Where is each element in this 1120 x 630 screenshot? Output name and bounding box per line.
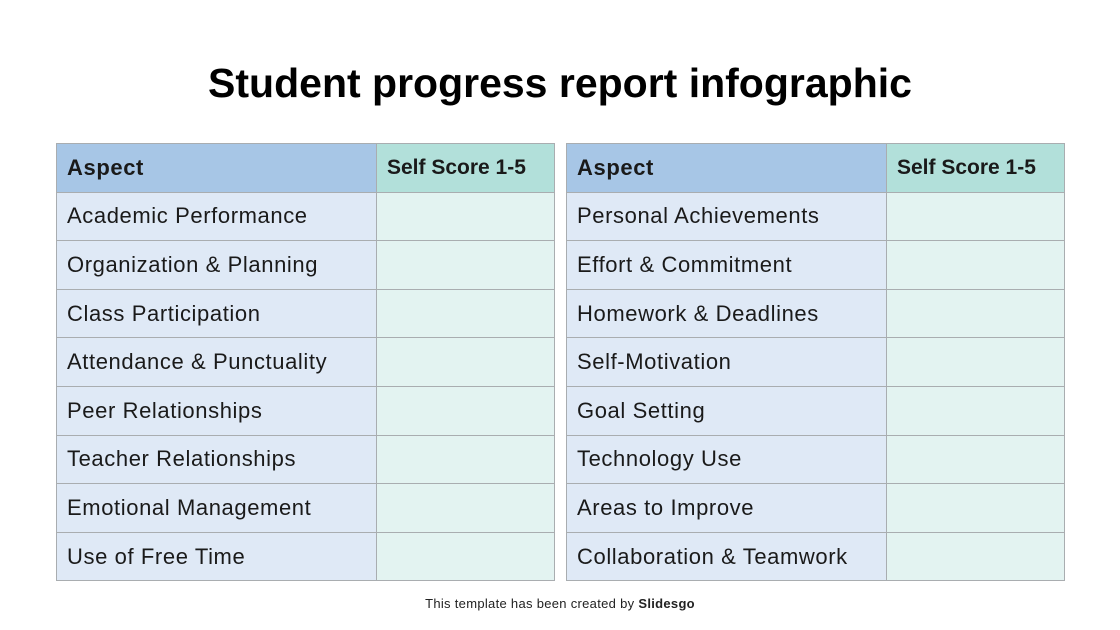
table: left: Peer Relationships (67, 398, 262, 423)
table: right: Personal Achievements (577, 203, 820, 228)
table: right: Areas to Improve (577, 495, 754, 520)
table: left: Class Participation (67, 301, 261, 326)
table: right: Self-Motivation (577, 349, 732, 374)
table: left (56, 143, 555, 581)
table: right: Collaboration & Teamwork (577, 544, 848, 569)
table: left: Academic Performance (67, 203, 308, 228)
table: right: Technology Use (577, 446, 742, 471)
table: right (566, 143, 1065, 581)
table: right: Aspect (577, 155, 654, 180)
table: left: Teacher Relationships (67, 446, 296, 471)
table: left: Self Score 1-5 (387, 156, 526, 179)
table: right: Goal Setting (577, 398, 705, 423)
table: right: Self Score 1-5 (897, 156, 1036, 179)
table: left: Attendance & Punctuality (67, 349, 327, 374)
table: left: Aspect (67, 155, 144, 180)
table: left: Use of Free Time (67, 544, 245, 569)
table: left: Emotional Management (67, 495, 311, 520)
table: right: Homework & Deadlines (577, 301, 819, 326)
title: Student progress report infographic (208, 60, 912, 106)
footer credit: This template has been created by Slidesgo (425, 596, 695, 611)
table: left: Organization & Planning (67, 252, 318, 277)
table: right: Effort & Commitment (577, 252, 792, 277)
